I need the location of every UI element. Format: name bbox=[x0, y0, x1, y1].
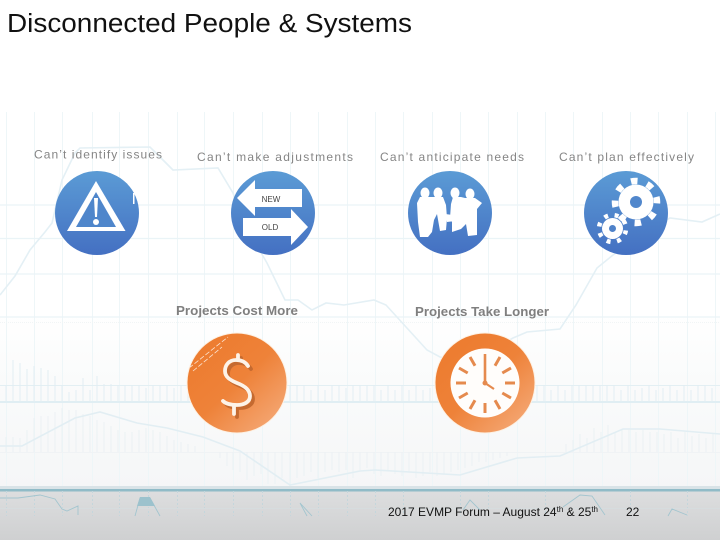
upper bars bbox=[6, 360, 712, 402]
label: can't plan effectively: Can’t plan effectively bbox=[559, 150, 694, 164]
panel: can't plan effectively bbox=[559, 150, 694, 255]
title: Disconnected People & Systems bbox=[7, 10, 412, 38]
panel: can't identify issues bbox=[34, 148, 162, 255]
label: can't anticipate needs: Can’t anticipate needs bbox=[380, 150, 524, 164]
footer text: 2017 EVMP Forum – August 24 bbox=[388, 505, 557, 519]
footer text: & 25 bbox=[563, 505, 592, 519]
footer text: th bbox=[591, 505, 598, 514]
icon: dollar sign bbox=[186, 332, 288, 434]
panel: projects take longer bbox=[415, 305, 549, 434]
panel: can't make adjustments bbox=[197, 150, 353, 255]
icon: gears bbox=[584, 171, 668, 255]
label: projects cost more: Projects Cost More bbox=[176, 304, 298, 318]
panel: projects cost more bbox=[176, 304, 298, 434]
icon: new and old arrows: OLD bbox=[262, 223, 278, 232]
icon: clock bbox=[434, 332, 536, 434]
page number: 22 bbox=[626, 505, 640, 519]
main curve bbox=[0, 147, 720, 362]
icon: new and old arrows bbox=[231, 171, 315, 255]
icon: warning triangle bbox=[55, 171, 139, 255]
icon: new and old arrows: NEW bbox=[262, 195, 281, 204]
footer band bbox=[0, 486, 720, 540]
label: can't make adjustments: Can’t make adjustments bbox=[197, 150, 353, 164]
label: projects take longer: Projects Take Longer bbox=[415, 305, 549, 319]
lower curve bbox=[0, 412, 720, 485]
lower bars bbox=[6, 408, 713, 486]
panel: can't anticipate needs bbox=[380, 150, 524, 255]
footer text: th bbox=[557, 505, 563, 514]
icon: group of people bbox=[408, 171, 492, 255]
background grid and chart pattern bbox=[0, 112, 720, 486]
label: can't identify issues: Can’t identify issues bbox=[34, 148, 162, 162]
